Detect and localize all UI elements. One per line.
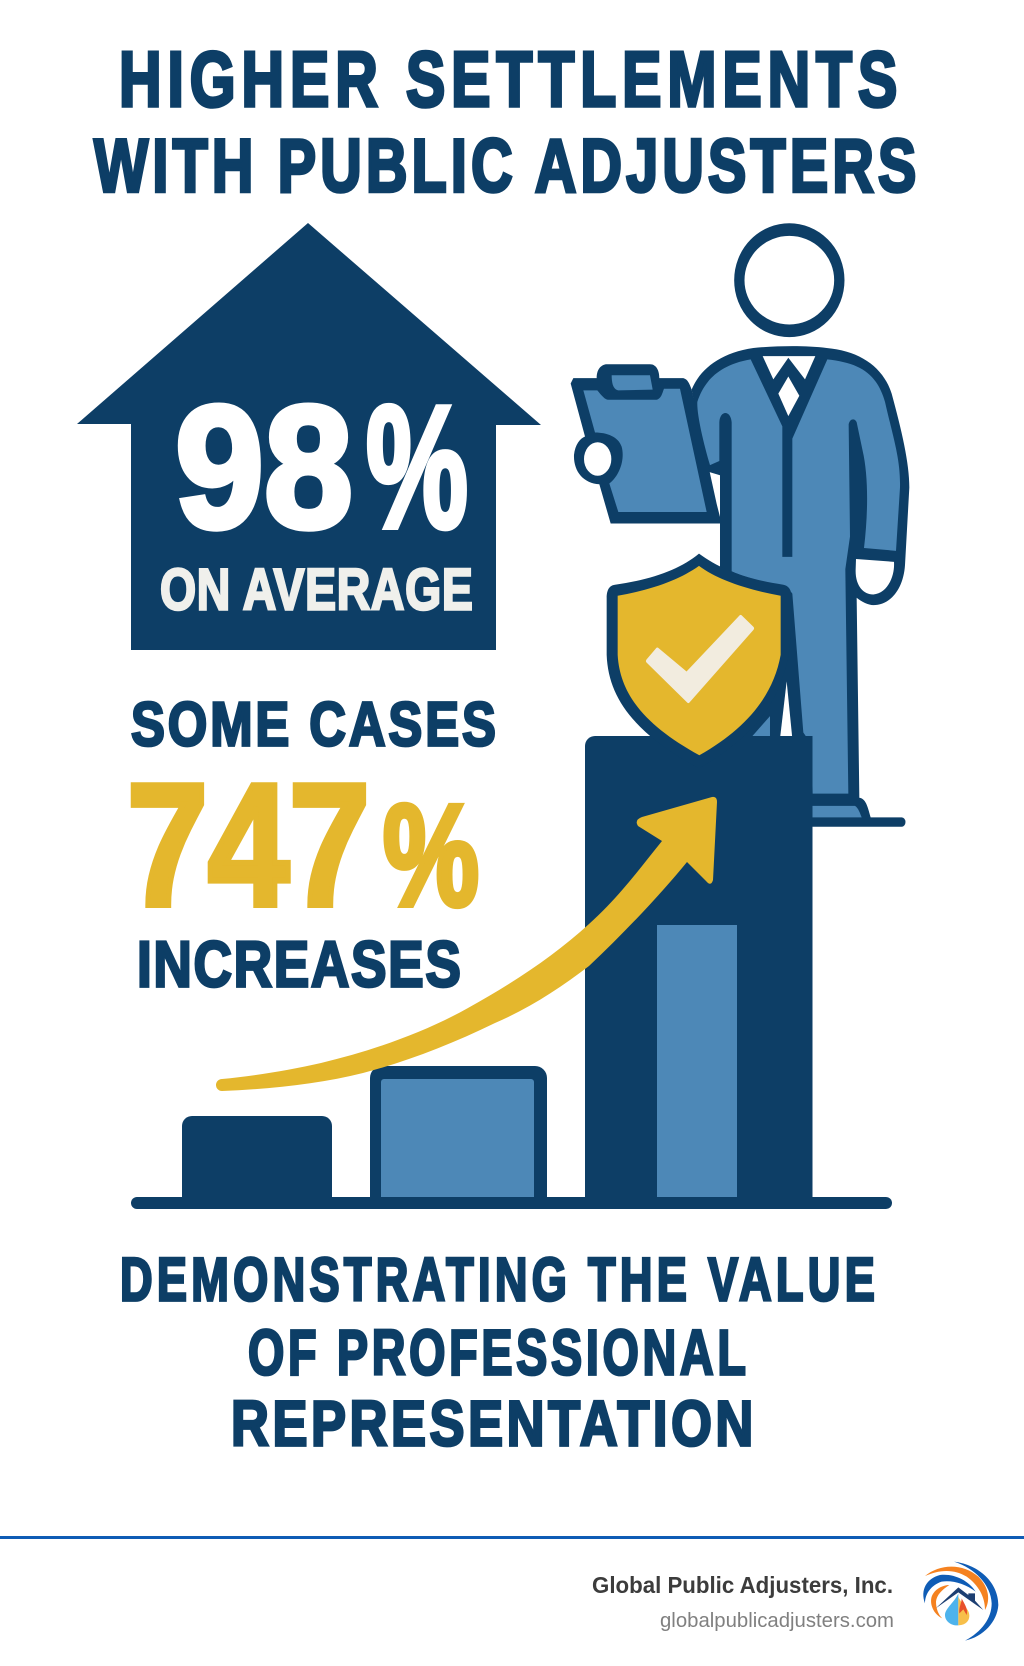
arm gap	[713, 477, 720, 505]
bar: small	[182, 1116, 332, 1200]
text block: some cases 747% increases	[127, 691, 496, 1001]
left hand	[584, 442, 611, 476]
title	[94, 36, 916, 209]
leg sliver	[753, 716, 770, 739]
closing statement: DEMONSTRATING THE VALUE	[120, 1246, 875, 1314]
footer: website: globalpublicadjusters.com	[660, 1610, 894, 1632]
stat: 98%: %	[366, 369, 468, 564]
footer divider	[0, 1536, 1024, 1539]
title: WITH PUBLIC ADJUSTERS	[94, 124, 916, 209]
stat: 98%	[175, 369, 468, 564]
leg gap	[780, 681, 792, 739]
stat: 747%: %	[383, 775, 479, 936]
closing statement: OF PROFESSIONAL	[248, 1316, 746, 1388]
label: on average: ON AVERAGE	[160, 558, 473, 623]
clipboard	[571, 364, 722, 523]
head	[739, 230, 839, 331]
suit	[697, 359, 900, 794]
right hand	[856, 559, 894, 594]
bar: medium fill	[381, 1079, 534, 1197]
arrow: rising gold arrow	[216, 797, 717, 1091]
bar: tall	[585, 736, 812, 1200]
panel: house with 98% on average	[77, 223, 541, 650]
icon: company logo	[923, 1562, 998, 1641]
clipboard clip	[612, 375, 653, 390]
axis	[131, 1197, 892, 1209]
body silhouette	[692, 346, 909, 827]
footer: company name: Global Public Adjusters, Inc.	[592, 1572, 893, 1598]
shoe	[812, 806, 862, 817]
bar: tall fill	[657, 925, 737, 1197]
title: HIGHER SETTLEMENTS	[119, 36, 897, 123]
checkmark	[648, 617, 752, 701]
tie	[778, 377, 799, 416]
closing statement	[120, 1246, 875, 1460]
shirt collar	[763, 356, 815, 379]
stat: 98%: 98	[175, 369, 353, 564]
clipboard sheet	[583, 389, 707, 512]
icon: shield with checkmark	[607, 554, 792, 768]
bar: medium	[370, 1066, 547, 1200]
closing statement: REPRESENTATION	[231, 1389, 753, 1460]
icon: adjuster figure with clipboard	[571, 230, 909, 827]
text block: some cases 747% increases: SOME CASES	[131, 691, 496, 760]
stat: 747%: 747	[127, 747, 370, 942]
text block: some cases 747% increases: INCREASES	[137, 928, 461, 1001]
bar chart	[131, 736, 892, 1209]
